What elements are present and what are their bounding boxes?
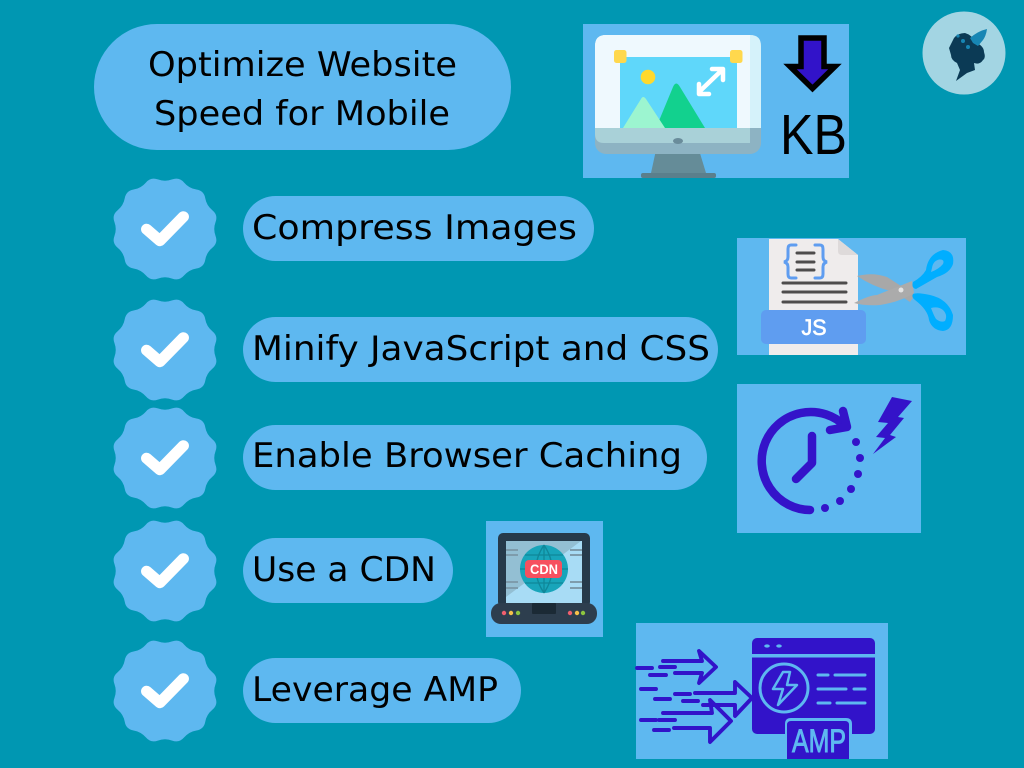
icon: clock with arrow (762, 411, 847, 510)
icon: monitor with image (595, 35, 761, 178)
step 2: minify (114, 300, 718, 400)
label pill (243, 658, 521, 723)
icon: speed arrows (637, 651, 752, 742)
label pill: Leverage AMP (252, 670, 498, 710)
icon: JS document: JS (802, 315, 826, 340)
label pill: Enable Browser Caching (252, 436, 682, 476)
icon: down arrow (790, 38, 835, 88)
step 5: AMP (114, 641, 521, 741)
icon: check badge (114, 408, 216, 508)
icon: check badge (114, 641, 216, 741)
icon: lightning bolt (873, 397, 912, 454)
label pill (243, 538, 453, 603)
icon: dotted arc (821, 438, 864, 512)
icon: laptop: CDN (530, 561, 558, 577)
avatar logo (922, 12, 1006, 94)
step 1: compress images (114, 179, 594, 279)
step 4: CDN (114, 521, 453, 621)
title (94, 24, 511, 150)
label pill (243, 317, 718, 382)
panel: caching clock (737, 384, 921, 533)
label pill: Minify JavaScript and CSS (252, 329, 710, 369)
icon: check badge (114, 179, 216, 279)
label pill: Use a CDN (252, 550, 436, 590)
icon: AMP badge: AMP (792, 723, 846, 759)
icon: check badge (114, 300, 216, 400)
label pill (243, 425, 707, 490)
panel: image compression icon (583, 24, 849, 178)
label: KB: KB (780, 103, 847, 167)
title: Optimize Website (148, 45, 457, 85)
icon: scissors (854, 250, 953, 331)
step 3: caching (114, 408, 707, 508)
panel: JS file and scissors (737, 238, 966, 355)
panel: CDN laptop (486, 521, 603, 637)
icon: JS document (761, 239, 866, 355)
icon: browser window (752, 638, 875, 734)
label pill (243, 196, 594, 261)
icon: check badge (114, 521, 216, 621)
title: Speed for Mobile (154, 94, 450, 134)
panel: AMP (636, 623, 888, 759)
label pill: Compress Images (252, 208, 577, 248)
